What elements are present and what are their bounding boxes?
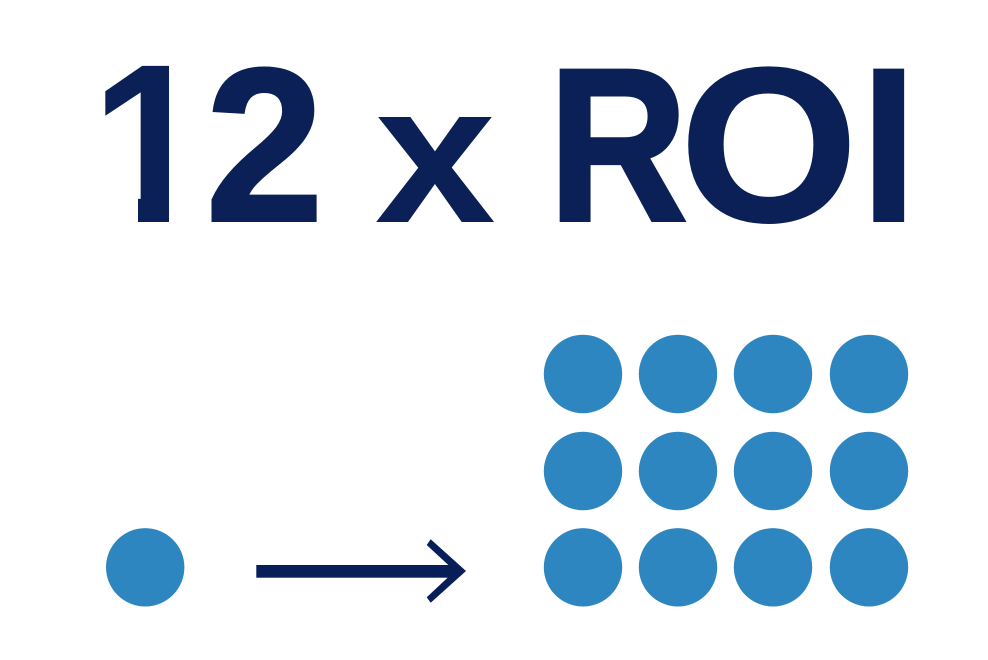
title: 2 — [205, 22, 324, 267]
title — [105, 66, 904, 224]
infographic — [105, 66, 908, 606]
title: O — [680, 23, 858, 268]
single blue dot — [106, 528, 184, 606]
arrow — [256, 539, 466, 603]
title: 1 — [91, 16, 210, 270]
grid of twelve blue dots — [544, 335, 908, 606]
title: R — [548, 23, 688, 267]
title: I — [859, 21, 918, 270]
title: x — [375, 43, 496, 265]
